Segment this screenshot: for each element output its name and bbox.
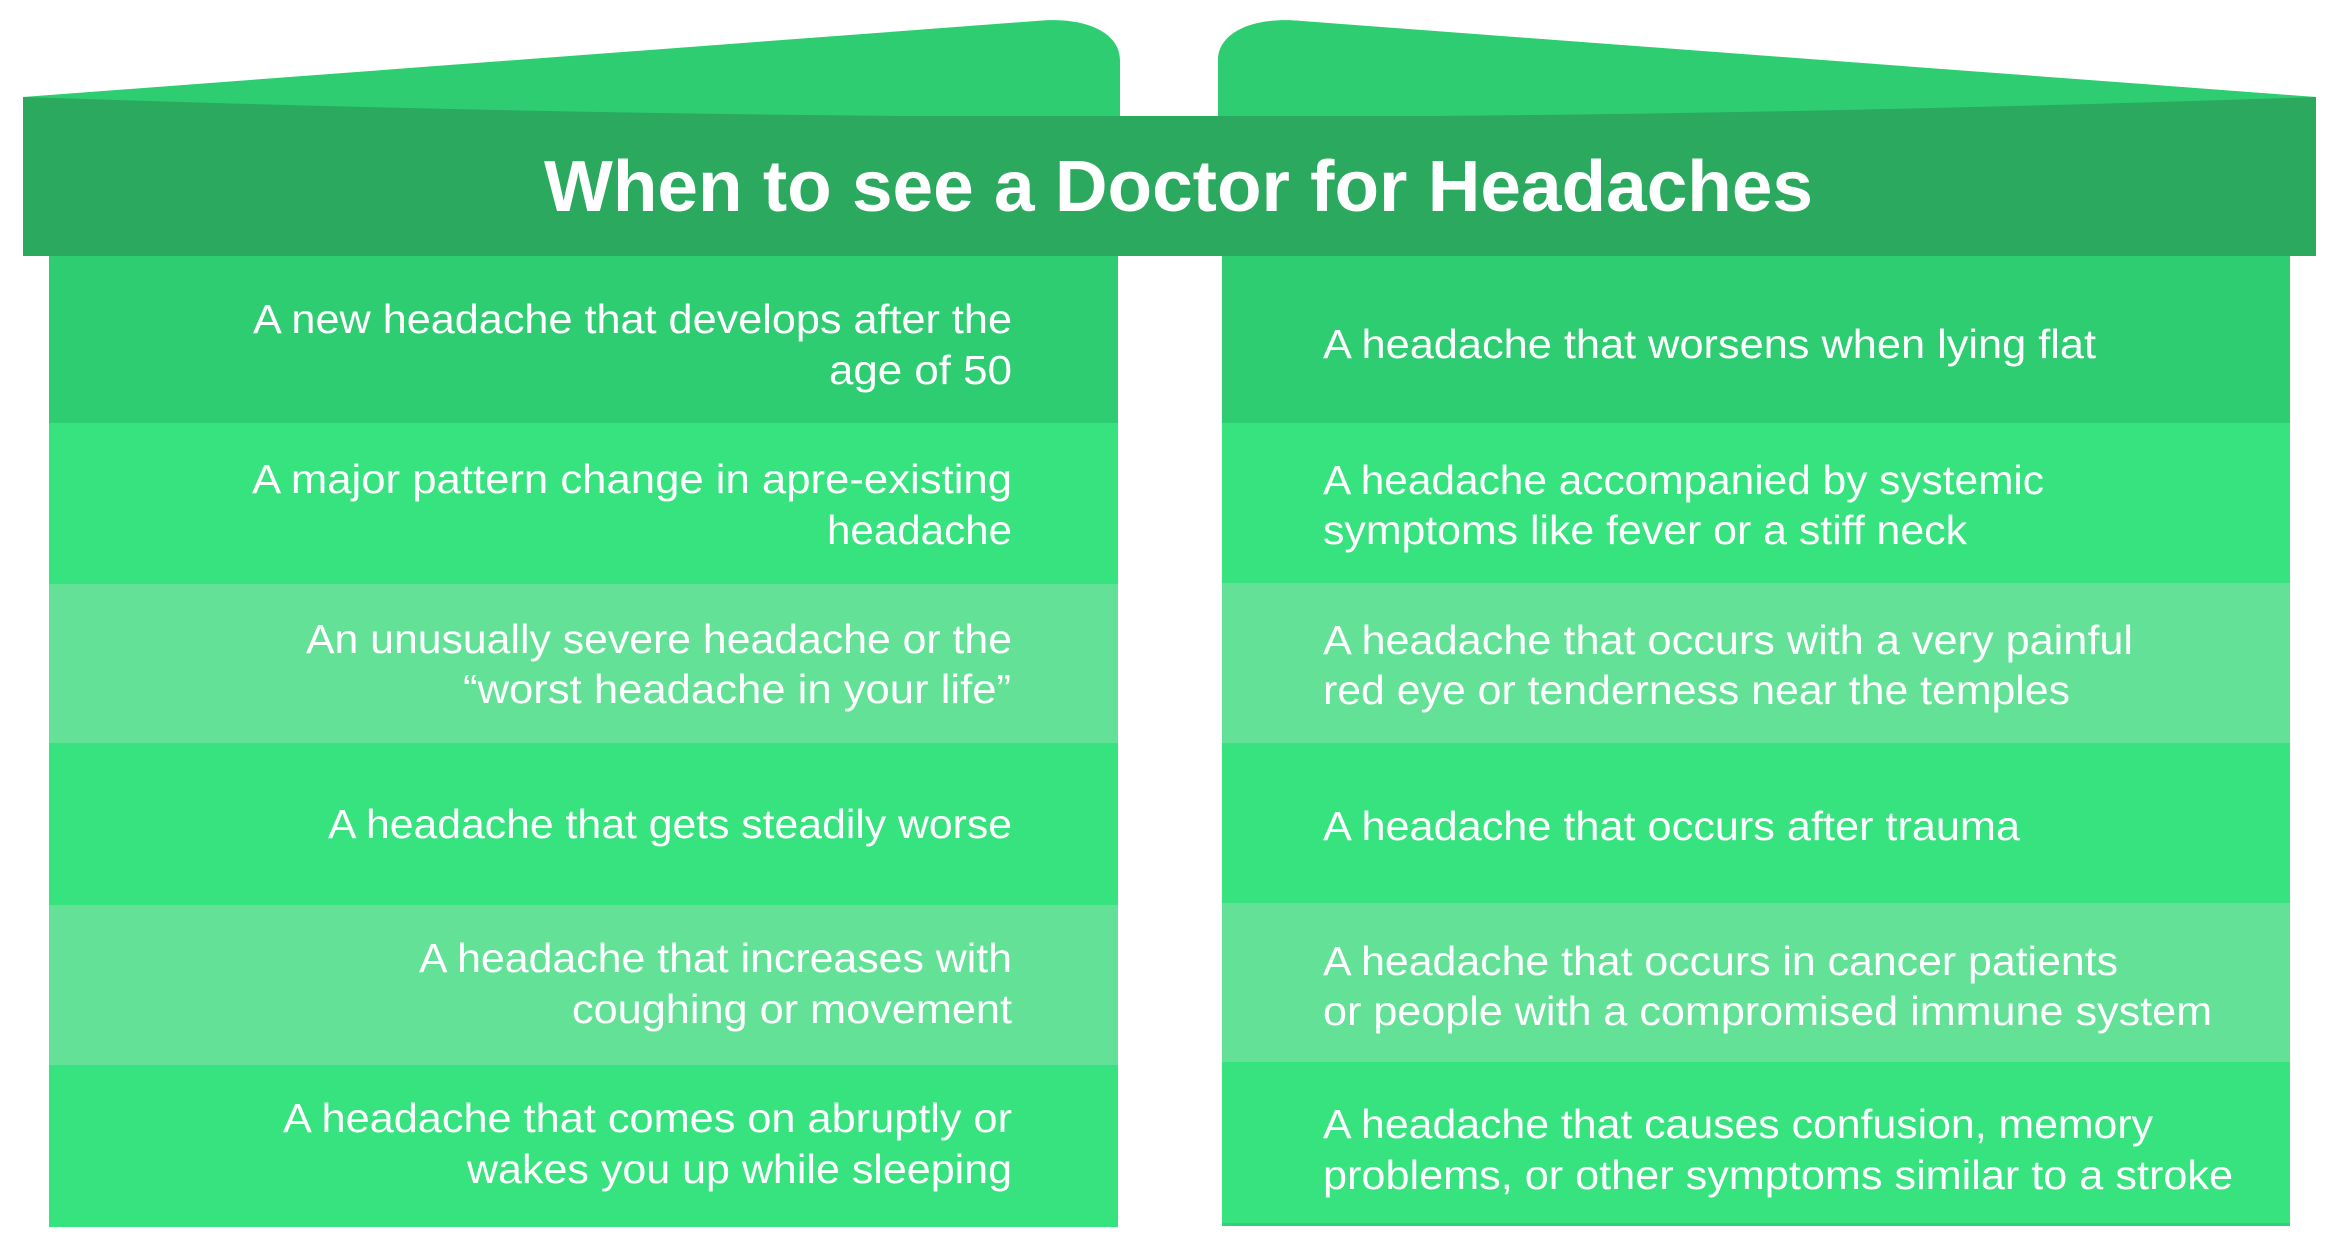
title: When to see a Doctor for Headaches xyxy=(544,147,1813,227)
left row 2 xyxy=(49,423,1118,584)
left row 4 xyxy=(49,743,1118,905)
right row 2: A headache accompanied by systemic xyxy=(1323,457,2044,503)
right row 6: problems, or other symptoms similar to a stroke xyxy=(1323,1152,2233,1198)
left row 5: coughing or movement xyxy=(572,986,1013,1032)
left row 2: A major pattern change in apre-existing xyxy=(252,456,1012,502)
right row 3 xyxy=(1222,583,2290,743)
right row 1 xyxy=(1222,250,2290,423)
left row 2: headache xyxy=(827,507,1012,553)
right row 2: symptoms like fever or a stiff neck xyxy=(1323,507,1968,553)
right row 3: red eye or tenderness near the temples xyxy=(1323,667,2070,713)
title banner xyxy=(23,97,2316,256)
right row 5 xyxy=(1222,903,2290,1062)
right row 6 xyxy=(1222,1062,2290,1226)
right row 6: A headache that causes confusion, memory xyxy=(1323,1101,2154,1147)
right row 4: A headache that occurs after trauma xyxy=(1323,803,2020,849)
right row 5: A headache that occurs in cancer patients xyxy=(1323,938,2118,984)
left row 3: An unusually severe headache or the xyxy=(306,616,1012,662)
left row 1 xyxy=(49,250,1118,423)
right row 2 xyxy=(1222,423,2290,583)
left row 5 xyxy=(49,905,1118,1065)
left row 6: A headache that comes on abruptly or xyxy=(283,1095,1012,1141)
left row 6 xyxy=(49,1065,1118,1227)
right row 5: or people with a compromised immune system xyxy=(1323,988,2212,1034)
right row 4 xyxy=(1222,743,2290,903)
left row 3: “worst headache in your life” xyxy=(463,666,1011,712)
left row 5: A headache that increases with xyxy=(419,935,1012,981)
left row 3 xyxy=(49,584,1118,743)
left row 1: A new headache that develops after the xyxy=(253,296,1012,342)
left row 4: A headache that gets steadily worse xyxy=(328,801,1012,847)
right row 1: A headache that worsens when lying flat xyxy=(1323,321,2097,367)
left folder flap xyxy=(23,20,1120,130)
left row 6: wakes you up while sleeping xyxy=(466,1146,1012,1192)
panel: left column of warning signs xyxy=(49,250,1118,1227)
left row 1: age of 50 xyxy=(829,347,1012,393)
right folder flap xyxy=(1218,20,2316,130)
right row 3: A headache that occurs with a very painful xyxy=(1323,617,2133,663)
panel: right column of warning signs xyxy=(1222,250,2290,1226)
